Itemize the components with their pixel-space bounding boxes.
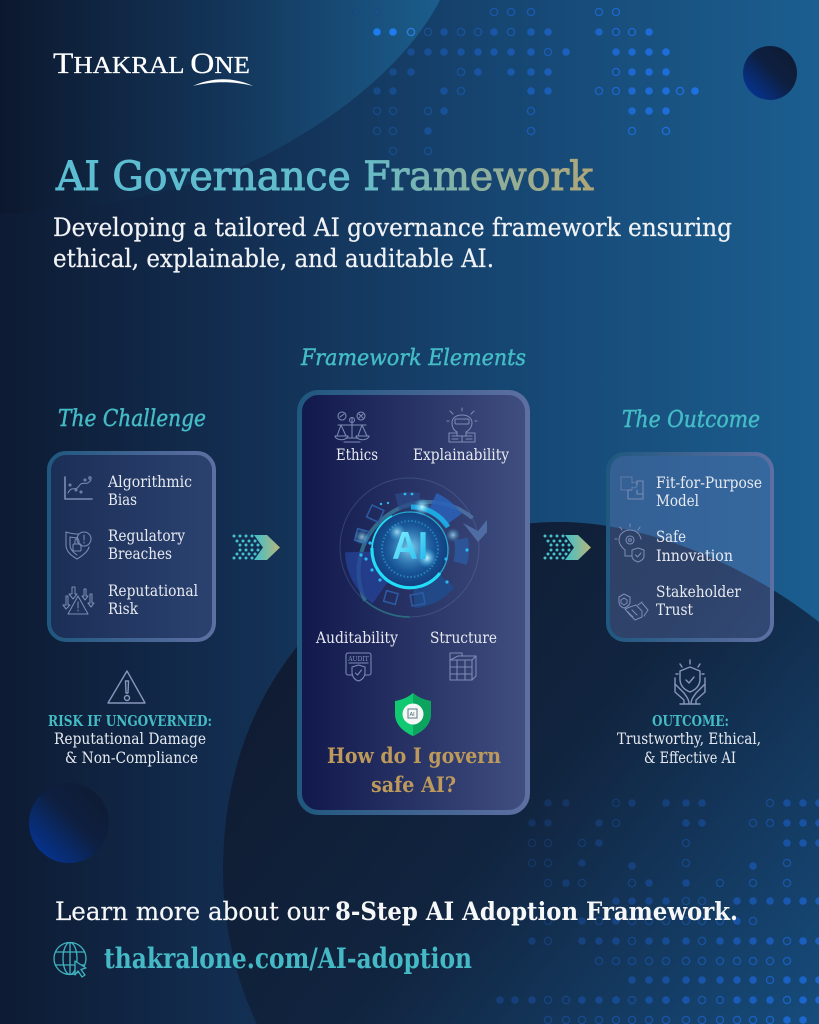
text: Reputational Risk: Risk (108, 600, 139, 618)
label: Explainability: Explainability (413, 446, 509, 464)
text: Reputational Risk (108, 582, 198, 618)
callout: outcome (617, 660, 761, 767)
label: Ethics: Ethics (336, 446, 378, 464)
text: Regulatory Breaches: Breaches (108, 545, 172, 563)
icon: explainability bulb (447, 408, 477, 442)
link: thakralone.com/AI-adoption: thakralone.com/AI-adoption (104, 942, 472, 975)
text: Algorithmic Bias: Algorithmic (107, 473, 192, 491)
icon: globe with cursor (54, 942, 86, 977)
question: how do I govern safe AI: How do I govern (327, 743, 501, 768)
icon: audit document shield (346, 653, 371, 681)
icon: warning triangle (108, 671, 145, 703)
text: Fit-for-Purpose Model: Model (656, 492, 699, 510)
graphic: AI core with circular arrow (340, 478, 487, 617)
label: Structure: Structure (430, 629, 497, 647)
icon: hands holding shield (675, 660, 705, 704)
text: Safe Innovation: Safe (656, 528, 686, 546)
callout: risk if ungoverned: Reputational Damage (54, 730, 206, 748)
text: Algorithmic Bias (107, 473, 192, 509)
icon: green AI shield: AI (410, 712, 415, 718)
icon: ethics scales (335, 412, 369, 442)
heading: Framework Elements: Framework Elements (300, 346, 526, 371)
callout: risk if ungoverned: & Non-Compliance (65, 749, 198, 767)
callout: outcome: OUTCOME: (652, 712, 729, 730)
icon: regulatory shield (66, 532, 91, 559)
dot pattern: top (352, 8, 699, 155)
text: Stakeholder Trust: Trust (656, 601, 694, 619)
arrow: framework to outcome (544, 534, 591, 560)
arrow: challenge to framework (232, 534, 280, 560)
icon: green AI shield (395, 693, 431, 736)
text: Reputational Risk: Reputational (108, 582, 198, 600)
subtitle: ethical, explainable, and auditable AI. (53, 244, 494, 273)
text: Stakeholder Trust: Stakeholder (656, 583, 742, 601)
call to action text (55, 897, 738, 926)
callout: risk if ungoverned (48, 671, 212, 767)
text: Safe Innovation: Innovation (656, 547, 733, 565)
panel: framework elements (300, 392, 528, 812)
heading: The Challenge: The Challenge (58, 406, 206, 432)
callout: risk if ungoverned: RISK IF UNGOVERNED: (48, 712, 212, 730)
callout: outcome: & Effective AI (644, 749, 736, 767)
panel: the challenge (49, 453, 214, 640)
icon: reputational risk arrows (63, 587, 94, 614)
heading: The Outcome: The Outcome (622, 407, 760, 433)
call to action text: 8-Step AI Adoption Framework. (335, 897, 738, 926)
icon: safe innovation bulb (615, 524, 644, 562)
icon: audit document shield: AUDIT (347, 656, 369, 663)
background shape: lower dark curve (223, 522, 819, 1024)
icon: puzzle pieces (621, 477, 643, 499)
decorative orb: bottom left (29, 783, 109, 863)
subtitle: Developing a tailored AI governance framework ensuring (53, 213, 732, 242)
graphic: AI core with circular arrow: AI (392, 525, 428, 568)
question: how do I govern safe AI (327, 743, 501, 797)
icon: algorithmic bias chart (65, 477, 92, 499)
panel: the outcome (608, 454, 772, 640)
background shape: top-left curve (0, 0, 440, 214)
text: Stakeholder Trust (656, 583, 742, 619)
logo: Thakral One: THAKRAL ONE (53, 47, 250, 80)
text: Safe Innovation (656, 528, 733, 565)
title: AI Governance Framework (55, 154, 594, 200)
text: Algorithmic Bias: Bias (108, 491, 137, 509)
question: how do I govern safe AI: safe AI? (371, 772, 456, 797)
text: Regulatory Breaches: Regulatory (108, 527, 185, 545)
text: Fit-for-Purpose Model: Fit-for-Purpose (656, 474, 762, 492)
icon: stakeholder handshake (619, 594, 648, 620)
subtitle (53, 213, 732, 273)
icon: structure cube grid (450, 653, 476, 680)
dot pattern: bottom right (496, 799, 819, 1024)
text: Fit-for-Purpose Model (656, 474, 762, 510)
label: Auditability: Auditability (315, 629, 398, 647)
callout: outcome: Trustworthy, Ethical, (617, 730, 761, 748)
call to action text: Learn more about our (55, 897, 329, 926)
decorative orb: top right (743, 46, 797, 100)
text: Regulatory Breaches (108, 527, 185, 563)
